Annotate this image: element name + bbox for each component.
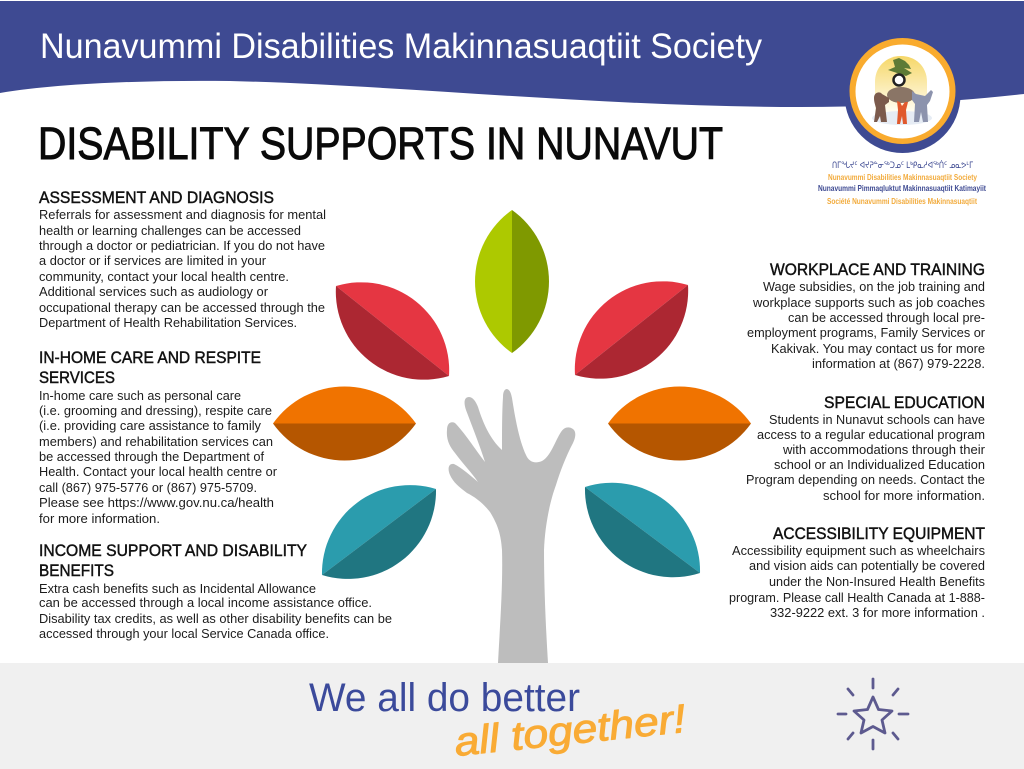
body text: school or an Individualized Education: [774, 457, 985, 472]
banner title: Nunavummi Disabilities Makinnasuaqtiit Society: [40, 27, 762, 66]
body text: accessed through your local Service Canada office.: [39, 626, 329, 641]
logo rock: [887, 87, 915, 103]
body text: occupational therapy can be accessed through the: [39, 300, 325, 315]
logo captions: [818, 160, 986, 206]
body text: Please see https://www.gov.nu.ca/health: [39, 495, 274, 510]
body text: members) and rehabilitation services can: [39, 434, 273, 449]
heading: WORKPLACE AND TRAINING: [770, 261, 985, 279]
body text: with accommodations through their: [782, 442, 986, 457]
body text: [729, 543, 985, 620]
body text: Department of Health Rehabilitation Services.: [39, 315, 297, 330]
body text: In-home care such as personal care: [39, 388, 241, 403]
tree illustration: [273, 210, 751, 663]
english caption: Nunavummi Disabilities Makinnasuaqtiit Society: [828, 172, 977, 182]
body text: [39, 388, 278, 526]
body text: Students in Nunavut schools can have: [769, 412, 985, 427]
logo rings: [844, 37, 960, 153]
logo figure left: [874, 92, 889, 122]
slogan line one: We all do better: [309, 676, 580, 720]
body text: can be accessed through local pre-: [788, 310, 985, 325]
logo arch: [875, 56, 927, 112]
heading: ACCESSIBILITY EQUIPMENT: [773, 525, 985, 543]
leaf: middle right orange: [608, 387, 751, 460]
logo figure middle: [897, 101, 908, 124]
body text: [747, 279, 986, 371]
logo snow: [872, 111, 932, 125]
body text: Program depending on needs. Contact the: [746, 472, 985, 487]
slogan: [309, 676, 688, 765]
french caption: Société Nunavummi Disabilities Makinnasuaqtiit: [827, 196, 977, 206]
body text: Extra cash benefits such as Incidental Allowance: [39, 581, 316, 596]
main title: DISABILITY SUPPORTS IN NUNAVUT: [38, 118, 723, 169]
body text: (i.e. grooming and dressing), respite care: [39, 403, 272, 418]
body text: Kakivak. You may contact us for more: [771, 341, 985, 356]
body text: through a doctor or pediatrician. If you do not have: [39, 238, 325, 253]
syllabics caption: ᑎᒥᖓᔪᑦ ᐊᔪᕈᓐᓂᖅᑐᓄᑦ ᒪᒃᑭᓇᓱᐊᖅᑏᑦ ᓄᓇᕗᒻᒥ: [832, 160, 973, 170]
body text: Additional services such as audiology or: [39, 284, 269, 299]
section: special education: [746, 394, 986, 503]
leaf: upper right red: [575, 281, 688, 379]
body text: Wage subsidies, on the job training and: [763, 279, 985, 294]
section: assessment and diagnosis: [39, 189, 326, 330]
body text: community, contact your local health centre.: [39, 269, 289, 284]
icon: shining star: [838, 679, 908, 749]
body text: health or learning challenges can be accessed: [39, 223, 301, 238]
logo: [844, 37, 960, 153]
body text: a doctor or if services are limited in your: [39, 253, 267, 268]
body text: information at (867) 979-2228.: [812, 356, 985, 371]
section: income support and disability benefits: [39, 542, 392, 641]
heading: [39, 349, 261, 387]
heading: INCOME SUPPORT AND DISABILITY: [39, 542, 307, 560]
body text: Referrals for assessment and diagnosis for mental: [39, 207, 326, 222]
body text: [39, 207, 326, 330]
heading: SPECIAL EDUCATION: [824, 394, 985, 412]
logo figure right: [912, 90, 933, 122]
body text: 332-9222 ext. 3 for more information .: [770, 605, 985, 620]
heading: SERVICES: [39, 369, 115, 387]
body text: Disability tax credits, as well as other disability benefits can be: [39, 611, 392, 626]
footer band: [0, 663, 1024, 769]
body text: and vision aids can potentially be covered: [749, 558, 985, 573]
body text: can be accessed through a local income assistance office.: [39, 595, 372, 610]
body text: [39, 581, 392, 641]
heading: ASSESSMENT AND DIAGNOSIS: [39, 189, 274, 207]
body text: be accessed through the Department of: [39, 449, 264, 464]
body text: Accessibility equipment such as wheelchairs: [732, 543, 985, 558]
section: in-home care and respite services: [39, 349, 278, 526]
heading: IN-HOME CARE AND RESPITE: [39, 349, 261, 367]
body text: [746, 412, 986, 503]
body text: workplace supports such as job coaches: [752, 295, 985, 310]
body text: Health. Contact your local health centre or: [39, 464, 278, 479]
slogan line two: all together!: [452, 697, 688, 765]
body text: school for more information.: [823, 488, 985, 503]
hand trunk: [447, 389, 575, 663]
section: workplace and training: [747, 261, 986, 371]
leaf: middle left orange: [273, 387, 416, 460]
body text: under the Non-Insured Health Benefits: [769, 574, 985, 589]
leaf: lower right teal: [585, 483, 700, 577]
heading: [39, 542, 307, 580]
body text: access to a regular educational program: [757, 427, 985, 442]
logo figure on wheelchair: [888, 58, 912, 86]
body text: (i.e. providing care assistance to family: [39, 418, 262, 433]
body text: call (867) 975-5776 or (867) 975-5709.: [39, 480, 257, 495]
body text: program. Please call Health Canada at 1-888-: [729, 590, 985, 605]
leaf: top green: [475, 210, 549, 353]
leaf: upper left red: [336, 282, 449, 380]
header banner: [0, 1, 1024, 107]
body text: for more information.: [39, 511, 160, 526]
body text: employment programs, Family Services or: [747, 325, 986, 340]
heading: BENEFITS: [39, 562, 114, 580]
leaf: lower left teal: [322, 485, 436, 579]
section: accessibility equipment: [729, 525, 985, 620]
